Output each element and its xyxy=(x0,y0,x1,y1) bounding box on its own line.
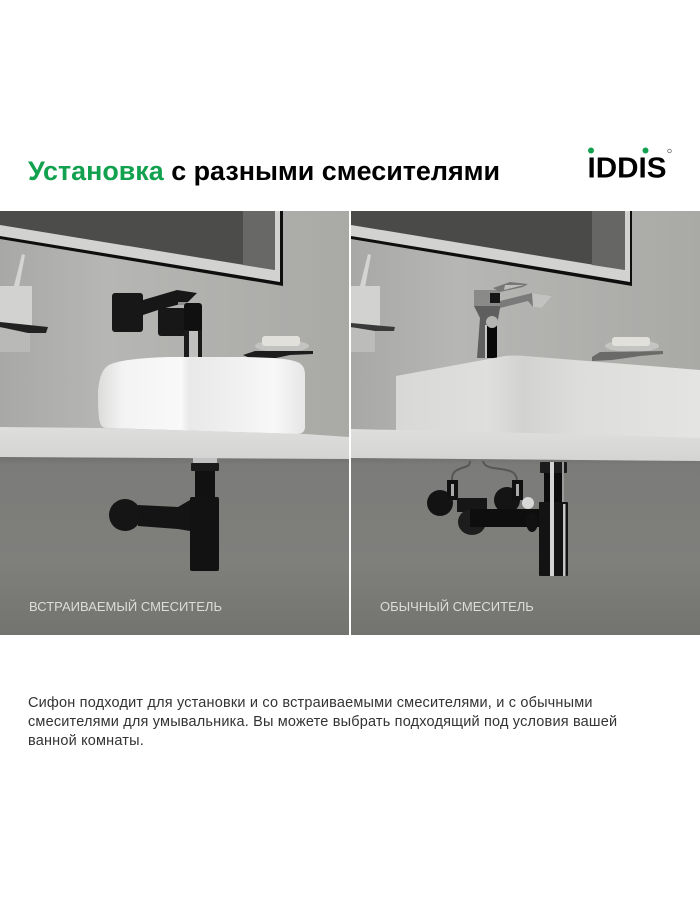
title: Установка с разными смесителями xyxy=(28,156,500,186)
lower wall xyxy=(351,450,700,635)
chrome supply valves and siphon xyxy=(427,461,568,576)
rectangular basin xyxy=(396,356,700,440)
round basin xyxy=(98,357,305,434)
label: regular mixer: ОБЫЧНЫЙ СМЕСИТЕЛЬ xyxy=(380,599,534,614)
lower wall xyxy=(0,450,349,635)
label: built-in mixer: ВСТРАИВАЕМЫЙ СМЕСИТЕЛЬ xyxy=(29,599,222,614)
description text: ванной комнаты. xyxy=(28,733,144,749)
logo: IDDIS: IDDIS xyxy=(588,152,666,184)
shelf xyxy=(0,427,349,459)
tumbler and shelf xyxy=(351,254,395,352)
soap dish xyxy=(592,337,663,361)
panel: regular mixer xyxy=(351,211,700,635)
description text: Сифон подходит для установки и со встраиваемыми смесителями, и с обычными xyxy=(28,695,593,711)
description text xyxy=(28,695,617,749)
soap dish xyxy=(243,336,313,358)
mirror xyxy=(0,211,283,286)
black siphon xyxy=(109,458,219,571)
shelf xyxy=(351,429,700,461)
tumbler and shelf xyxy=(0,254,48,352)
panel: built-in mixer xyxy=(0,211,349,635)
chrome faucet xyxy=(474,282,552,358)
mirror xyxy=(351,211,632,286)
wall-mounted faucet xyxy=(112,290,202,357)
description text: смесителями для умывальника. Вы можете выбрать подходящий под условия вашей xyxy=(28,714,617,730)
